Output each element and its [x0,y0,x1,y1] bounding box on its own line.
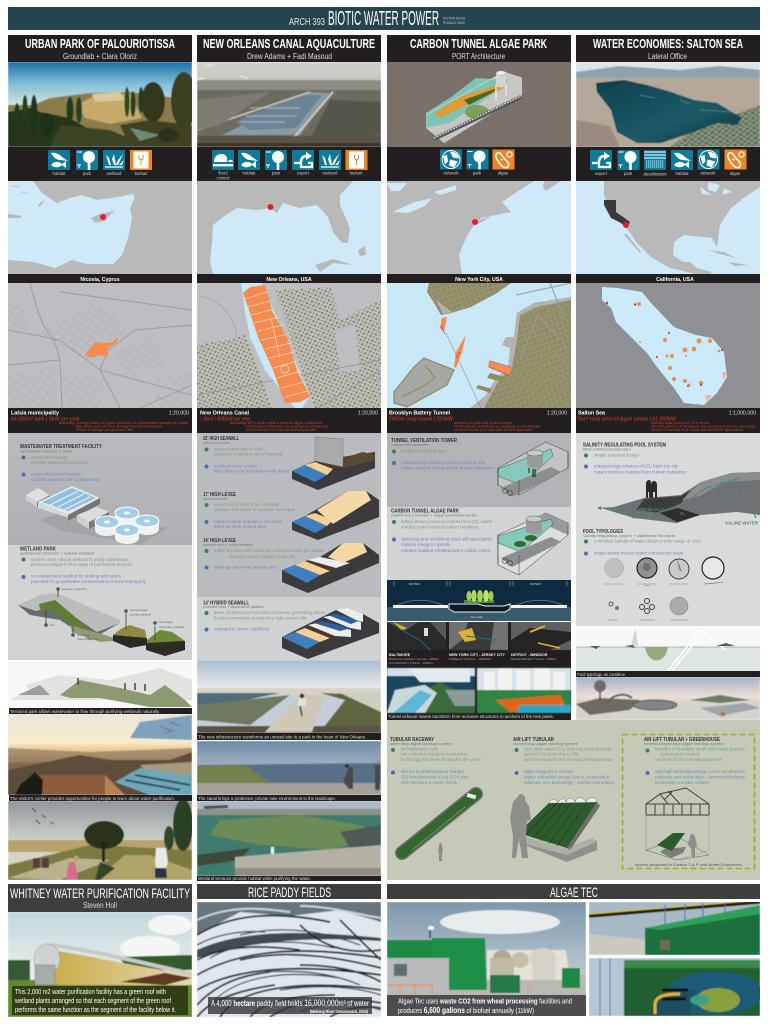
icon: algae [724,150,746,176]
panel: wastewater treatment facility: WASTEWATER TREATMENT FACILITY [20,444,103,450]
rendering: hilltop park with visitors [8,799,193,880]
system: air lift tubular: AIR LIFT TUBULAR [513,737,554,743]
icon: biofuel: biofuel [135,171,147,176]
con bullet [22,472,101,482]
section: 14' high levee: rubble breakers and additional wetlands break up a waves [214,548,325,553]
system: air lift tubular + greenhouse: can be much more visually expressive [655,757,723,762]
photo: New Orleans canal aerial [197,62,381,147]
info band: New Orleans Canal: 10,000 gallons of biodiesel are produced per km annually [246,424,328,428]
header: Whitney Water Purification Facility [8,884,192,912]
overlay text: Whitney: wetland plants arranged so that each segment of the green roof [14,996,172,1005]
panel: carbon tunnel algae park section: operating and retrofitting costs still speculative [401,536,493,542]
system: air lift tubular: recycled CO2 purity of up to 78% [524,752,579,756]
icon: wetland: wetland [107,171,122,176]
caption: Nicosia, Cyprus [8,274,192,283]
column 1 header: Urban Park of Palouriotissa: URBAN PARK OF PALOURIOTISSA [25,36,175,51]
icon: habitat [671,150,693,176]
section: 14' hybrid seawall: flooding stormwater provide free high-nutrient silts [214,616,308,620]
illustration: pool section [597,472,760,526]
panel: carbon tunnel algae park section: reinforced concrete + algae photobioreactor [391,512,478,518]
proposed aquaculture blocks [243,285,310,403]
caption: California, USA: California, USA [656,277,694,283]
title banner: RONALD TANG [443,21,465,25]
caption: pool typology [576,671,760,677]
caption: wetland terraces [197,876,381,881]
algae pond clusters [637,302,720,386]
icon: wetland: wetland [323,170,338,176]
caption: terraced park: Terraced park allows wastewater to flow through purifying wetlands naturally. [10,709,160,714]
photo triptych: tunnel sites [387,622,571,668]
caption: New York City, USA [387,274,571,283]
info band: Salton Sea: 1:1,000,000 [729,411,756,417]
aerial: Detroit – Windsor: Detroit-Windsor Tunnel - 1600m [511,658,556,661]
caption: New Orleans, USA: New Orleans, USA [266,277,312,283]
icon: network [440,150,462,176]
info band: Brooklyn Battery Tunnel: 20,000 gallons of biodiesel are produced per km annually [454,424,540,428]
header: Whitney Water Purification Facility: WHITNEY WATER PURIFICATION FACILITY [10,885,190,901]
photo: reactor containers [589,900,760,955]
pool type diagrams [604,557,724,620]
panel: carbon tunnel algae park section: CARBON TUNNEL ALGAE PARK [391,508,459,514]
info band: New Orleans Canal: assuming: 80% of site area is used for algae production [230,421,322,425]
illustration: pool water section [576,628,760,671]
photo: Palouriotissa park hillside [8,62,197,147]
illustration: algae park axonometric [498,513,568,575]
system: air lift tubular + greenhouse: relatively new technology - commercial infancy [655,774,746,780]
con bullet: energy and chemical intensive [31,472,81,476]
icon: park: park [473,170,482,176]
site plan: Latsia municipality [8,283,192,408]
photo: pool rendering [576,677,760,720]
column 4 header: Water Economies Salton Sea [576,35,760,62]
panel: wetland park: WETLAND PARK [20,546,56,552]
icon: habitat: habitat [243,170,256,176]
panel: tunnel ventilation tower: TUNNEL VENTILATION TOWER [391,438,457,444]
panel: carbon tunnel algae park section [387,507,571,580]
system: air lift tubular + greenhouse: temperature control [661,752,699,756]
section: 17' high levee: resists more force than a seawall [214,502,279,507]
caption: new infrastructure: The new infrastructure transforms an unused site to a park in the heart of New Orleans. [198,734,366,739]
illustration: pool section: SALINE WATER [725,520,759,526]
section: 14' high levee [203,538,379,593]
proposed algae pools [440,317,512,375]
icon: habitat: habitat [53,171,66,176]
panel: wastewater treatment facility: land/wood concrete + steel [20,448,72,454]
info band: Salton Sea: Salton Sea [578,411,605,417]
icon: flood control: control [217,176,229,180]
aerial: Baltimore: BALTIMORE [389,653,411,657]
info band: New Orleans Canal: New Orleans Canal [200,411,250,417]
icon: export [590,150,612,176]
info band: New Orleans Canal: used in turbines in the Cape plan 3000kW generated [246,428,316,432]
section: 14' high levee: 14' HIGH LEVEE [203,538,237,544]
section: 14' hybrid seawall: levee infrastructure becomes a revenue generating asset [214,610,325,615]
caption: New Orleans, USA [197,274,381,283]
illustration: tower axonometric [498,442,568,497]
info band: Latsia municipality: 200m³ of sewage can generate 1kW [76,428,133,432]
icon band: column 1 [8,147,192,181]
info band: Latsia municipality [8,408,192,433]
icon: habitat [238,150,260,176]
overlay text: Whitney [12,986,188,1015]
system: air lift tubular: closed loop algae farming system [513,741,579,746]
aerial: Baltimore: Fort McHenry Tunnel - 2200m [389,662,433,665]
location map: Cyprus [8,181,192,274]
rendering: canal promenade [197,741,381,795]
column 1 header: Urban Park of Palouriotissa: Groundlab + Clara Oloriz [63,52,137,61]
California highlight [604,200,630,228]
panel: salinity regulating pool system: SALINITY REGULATING POOL SYSTEM [583,442,666,448]
illustration: carbon tunnel axonometric [387,62,571,147]
column 4 header: Water Economies Salton Sea: Lateral Office [648,52,687,61]
icon: network: network [443,170,459,176]
sketch: terraced park elevation [8,662,192,707]
info band: Salton Sea: assuming: algae ponds cover 7% of the sea [651,421,709,425]
section: 22' high seawall: requires small area to build [214,446,264,452]
icon: wetland [319,150,341,176]
system: air lift tubular: system monitors and corrects pH/temperature [524,757,614,762]
panel: carbon tunnel algae park section: requires building infrastructure in urban zones [401,548,491,553]
caption: California, USA [576,274,760,283]
section: 14' hybrid seawall: 14' HYBRID SEAWALL [203,600,249,606]
illustration: pool section: FRESH H₂O [638,507,664,512]
system: tubular raceway: low embodied energy in construction [401,752,468,756]
site plan: New Orleans canal [197,283,381,408]
park and pier renderings: algae park [387,668,571,720]
caption: pool typology: Pool typology as combine [577,672,625,677]
icon: flood control: flood [218,170,228,176]
overlay text: Algae Tec: produces 6,600 gallons of biofuel annually (11kW) [398,1006,534,1015]
section: 17' high levee: 17' HIGH LEVEE [203,492,237,498]
section: 22' high seawall: smallest levee system [214,464,257,468]
column 1 header: Urban Park of Palouriotissa [8,35,192,62]
system: tubular raceway: technology has been around for 30+ years [401,757,482,762]
site plan: Brooklyn Battery Tunnel [387,283,571,408]
location marker [623,222,629,228]
caption: wetland terraces: Wetland terraces provide habitat while purifying the water. [198,876,311,881]
panel: carbon tunnel algae park section: requires energy to operate [401,542,451,547]
overlay text: rice paddy: (Mekong River Commission, 2010) [310,1009,369,1014]
panel: algae farming systems [387,720,760,880]
icon: habitat [48,150,70,176]
system: air lift tubular + greenhouse: system proposed in Carbon T.A.P. and Water Economies [635,863,742,867]
panel: salinity regulating pool system: salinity regulating system + additional functions [583,533,675,538]
illustration: treatment plant [26,486,168,545]
panel: salinity regulating pool system: towers must be isolated from human habitation [594,470,687,474]
section: 17' high levee [203,491,379,540]
system: tubular raceway: low maintenance costs [401,746,439,752]
illustration: wetland section: secondary wetland [159,625,184,629]
pro bullet [22,455,89,465]
illustration: wetland section: primary wetland [130,612,152,616]
system: air lift tubular + greenhouse: technically complex system [655,780,709,785]
icon: wetland [103,150,125,176]
title banner: ARCH 393 [289,17,325,28]
icon: habitat: habitat [676,171,689,176]
section drawing: tunnel night elevation: CO₂ intake [470,615,483,619]
con bullet [22,574,147,584]
icon: desalination [644,150,667,176]
panel: salinity regulating pool system [576,433,760,626]
icon: algae: algae [498,170,509,176]
info band: Salton Sea: 20,000 gallons of biodiesel are produced per km annually [651,424,756,428]
panel: tunnel ventilation tower: towers must be isolated from human habitation [401,466,495,470]
icon: export [292,150,314,176]
section: 17' high levee: rammed earth [203,496,227,501]
title banner [8,7,760,30]
section: 14' hybrid seawall: untested in storm conditions [214,626,270,632]
info band: Salton Sea: stored in tunnels in a Cape plan 2000kW generated [651,428,743,432]
illustration: wetland section: first stage [77,633,90,637]
section: 22' high seawall: reinforced concrete [203,440,231,445]
system: air lift tubular + greenhouse: benefits of standard air-lift with better passive [655,746,746,752]
pro bullet [22,557,133,567]
info band: Brooklyn Battery Tunnel: Brooklyn Battery Tunnel [389,411,451,417]
icon: network [698,150,720,176]
section: 22' high seawall: 22' HIGH SEAWALL [203,436,239,442]
info band: Latsia municipality: Latsia municipality [11,411,59,417]
column 3 header: Carbon Tunnel Algae Park: CARBON TUNNEL ALGAE PARK [410,36,547,51]
icon: biofuel [130,150,152,176]
con bullet: potential for groundwater contamination if done improperly [31,579,147,584]
panel: wetland park [8,545,192,660]
info band: Brooklyn Battery Tunnel: stored in tunnels in a Cape plan 2000kW generated [454,428,532,432]
column 3 header: Carbon Tunnel Algae Park [387,35,571,62]
illustration: wetland section: third stage [159,620,173,624]
icon: park [76,150,98,176]
icon band: column 4 [576,147,760,181]
aerial: New York City – Jersey City [449,622,508,661]
info band: Latsia municipality: this urban park will treat sewage from 16,000 people [76,424,162,428]
section: 17' high levee: cheaper and easier to maintain and repair [214,507,296,512]
icon: algae [492,150,514,176]
info band: Latsia municipality: assuming: average intake of Cyprus produces 2L concentrated sewage per capita [59,421,188,425]
system: air lift tubular: relatively new technology - commercial infancy [524,780,616,785]
system: air lift tubular + greenhouse: heated closed loop algae farming system [644,741,725,746]
location map: North America, California highlighted [576,181,760,274]
illustration: wetland section: treatment system [77,637,101,641]
pro bullet: produces biogas in first stage of purification process [31,562,133,567]
system: tubular raceway: TUBULAR RACEWAY [390,737,435,743]
icon band: column 3 [387,147,571,181]
panel: tunnel ventilation tower: releases large volumes of CO₂ back into city [401,460,486,465]
info band: Brooklyn Battery Tunnel: assuming: 80 pods used for area of algae [454,421,512,425]
aerial: New York City – Jersey City: Holland Tunnel - 2600m [449,658,491,661]
location map: US east coast [387,181,571,274]
info band: Brooklyn Battery Tunnel: 2800m long tunnel | 200kW [389,417,454,423]
caption: Nicosia, Cyprus: Nicosia, Cyprus [80,277,120,283]
column 2 header: New Orleans Canal Aquaculture [197,35,381,62]
illustration: pool section: O₂ [680,511,686,516]
section: 14' high levee: rammed earth + rubble breakers [203,542,253,547]
overlay text: Algae Tec [387,995,586,1016]
info band: Salton Sea [576,408,760,433]
panel: seawall and levee typologies [197,433,381,660]
header: Rice Paddy Fields: RICE PADDY FIELDS [248,884,331,900]
system: tubular raceway: only functions in warm areas [401,780,458,785]
location marker [100,214,106,220]
icon: export: export [595,171,608,176]
park and pier renderings: algae park: Tunnel exhaust towers transform from reclusive structures to anchors of the new parks. [388,714,554,719]
column 3 header: Carbon Tunnel Algae Park: PORT Architecture [452,52,505,61]
icon: biofuel [346,150,368,176]
icon: park [265,150,287,176]
aerial: Baltimore: Baltimore Harbour Tunnel - 2200m [389,658,439,661]
overlay text: Algae Tec: Algae Tec uses waste CO2 from wheat processing facilities and [398,996,572,1006]
panel: wastewater treatment facility [8,433,192,545]
column 2 header: New Orleans Canal Aquaculture: NEW ORLEANS CANAL AQUACULTURE [203,36,375,51]
rendering: aerial of algae park [387,668,475,713]
info band: New Orleans Canal: 1.5km² | 3600kW per year [200,417,250,423]
title banner: VICTOR PUNO [443,16,465,20]
system: air lift tubular + greenhouse: very high embodied energy cost in construction [655,769,746,774]
section: 14' high levee: takes up even more ground area [214,564,277,570]
illustration: wetland section: roof [49,623,54,627]
aerial: New York City – Jersey City: NEW YORK CITY - JERSEY CITY [449,653,506,657]
section drawing: tunnel night elevation [387,580,571,621]
icon: export: export [297,170,310,176]
info band: Salton Sea: 7km² total area of algae ponds | 61,000kW [577,417,677,423]
icon: desalination: desalination [644,172,667,176]
rendering: wetland terraces [197,801,381,876]
section: 14' hybrid seawall [203,600,379,659]
aerial: Detroit – Windsor [511,622,571,661]
section: 14' high levee: destructive energy, allowing a lower wall [229,554,295,559]
system: tubular raceway [390,737,482,861]
overlay text: Whitney: performs the same function as the segment of the facility below it. [15,1005,176,1014]
caption: visitor's center: The visitor's center provides opportunities for people to learn about water purification. [10,796,175,801]
panel: tunnel ventilation tower: reinforced concrete [391,442,430,447]
location marker [472,219,478,225]
location map: Gulf of Mexico [197,181,381,274]
info band: Brooklyn Battery Tunnel: 1:20,000 [547,411,567,417]
system: air lift tubular [510,737,616,862]
system: air lift tubular + greenhouse [622,734,754,868]
panel: tunnel ventilation tower [387,433,571,507]
caption: canal protection: The canal brings a protective, private lake environment to the landscape. [198,796,336,801]
panel: salinity regulating pool system: fibre-reinforced polymers [583,446,631,452]
panel: tunnel ventilation tower: simple practical design [401,448,447,454]
icon: park: park [624,171,633,176]
con bullet: no containment method for dealing with toxins [31,574,122,578]
system: tubular raceway: affected by pH/temperature changes [401,769,465,774]
icon: algae: algae [730,171,741,176]
system: air lift tubular: higher energy cost to maintain [524,769,573,774]
system: air lift tubular: higher embodied energy cost in construction [524,774,610,780]
section drawing: tunnel night elevation: BATTERY [530,582,542,586]
icon: park: park [83,171,92,176]
pro bullet: system uses natural wetland to purify wastewater [31,557,130,562]
panel: carbon tunnel algae park section: hybrid design produces biofuel from CO₂ waste [401,519,493,524]
system: tubular raceway: CO2 from atmosphere is only 12.5% pure [401,774,468,780]
illustration: pool section: VAPOR [720,480,737,485]
overlay text: rice paddy: A 4,000 hectare paddy field holds 16,000,000m³ of water [211,998,369,1008]
con bullet: complex systems take up large area [31,477,101,482]
section: 22' high seawall: relatively small amount of material [214,452,282,456]
icon: park [466,150,488,176]
photo: Whitney facility [8,912,192,1017]
info band: Latsia municipality: 1:20,000 [169,411,189,417]
panel: salinity regulating pool system: POOL TYPOLOGIES [583,529,624,535]
caption: canal protection [197,795,381,801]
illustration: wetland section [18,587,185,656]
overlay text: Whitney: This 2,000 m2 water purification facility has a green roof with [15,987,166,996]
pro bullet: multiple stages of monitoring [31,460,89,465]
section: 22' high seawall [203,436,375,490]
rendering: city park with pools [477,668,571,713]
info band: Latsia municipality: 64,000m² park | 5kW per year [11,417,80,423]
illustration: wetland section: rainwater collection [61,587,87,591]
proposed park footprint [85,337,117,358]
panel: salinity regulating pool system: releases large volumes of CO₂ back into city [594,464,679,468]
caption: New York City, USA: New York City, USA [455,277,503,283]
icon: park [618,150,640,176]
icon: network: network [700,170,716,176]
rendering: bicycle path along canal [197,660,381,733]
icon: biofuel: biofuel [350,170,362,176]
photo: Salton Sea aerial [576,62,760,147]
location marker [268,204,274,210]
photo: reactor cutaway with algae [589,958,763,1016]
site plan: Salton Sea [576,283,760,408]
panel: salinity regulating pool system: controlled salinity of water allows a wide range of uses [594,538,702,544]
system: tubular raceway: open loop algae farming system [390,741,453,746]
panel: salinity regulating pool system: shape variety means higher construction costs [594,550,684,556]
column 2 header: New Orleans Canal Aquaculture: Drew Adams + Fadi Masoud [247,52,332,61]
section: 17' high levee: takes up more ground area [214,524,267,529]
header: Whitney Water Purification Facility: Steven Holl [83,901,117,910]
icon: park: park [272,170,281,176]
overlay text: rice paddy [208,997,372,1014]
section: 17' high levee: rammed earth requires a low slope [214,519,283,524]
aerial: Baltimore [387,622,446,665]
panel: carbon tunnel algae park section: renders tunnel exhaust towers harmless [401,524,479,530]
illustration: wetland section: second stage [130,608,148,612]
section: 14' hybrid seawall: concrete piers + aquaculture paddies [203,604,264,609]
info band: New Orleans Canal: 1:20,000 [358,411,378,417]
illustration: pool section: HEAT [720,500,732,505]
section: 22' high seawall: little chance for interaction with water [214,468,290,474]
aerial: Detroit – Windsor: DETROIT - WINDSOR [511,653,548,657]
system: air lift tubular + greenhouse: AIR LIFT TUBULAR + GREENHOUSE [644,737,721,743]
pro bullet: proven technology [31,455,68,460]
panel: wetland park: land/wood concrete + natural wetland [20,550,95,556]
icon band: column 2 [197,147,381,181]
rendering: visitor's center at sunset [8,714,192,795]
panel: salinity regulating pool system: simple practical design [594,452,640,458]
system: air lift tubular: can utilize waste CO₂ from industrial systems [524,746,612,752]
header: Algae Tec: ALGAE TEC [550,884,598,900]
header: Algae Tec [387,884,760,900]
icon: flood control [212,150,234,180]
caption: new infrastructure [197,733,381,740]
title banner: BIOTIC WATER POWER [328,8,439,30]
section drawing: tunnel night elevation: BATTERY [409,582,421,586]
tunnel line [446,333,481,408]
photo: rice terraces [197,902,381,1017]
info band: New Orleans Canal [197,408,381,433]
info band: Brooklyn Battery Tunnel [387,408,571,433]
photo: Algae Tec containers [387,902,586,1016]
